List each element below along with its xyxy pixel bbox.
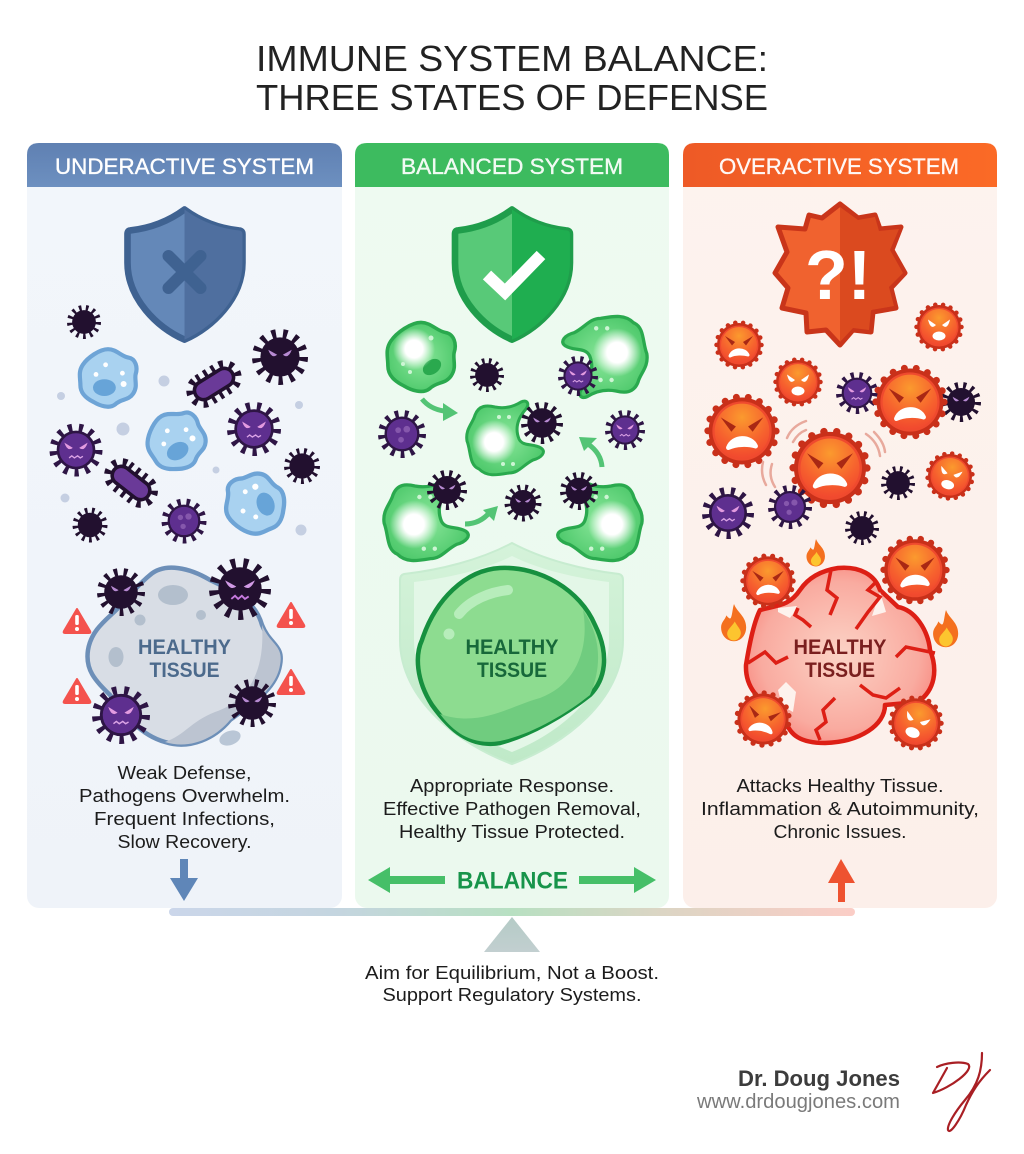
title xyxy=(256,38,768,118)
icons: flames xyxy=(721,539,958,647)
takeaway text xyxy=(365,962,659,1005)
caption: overactive xyxy=(701,775,979,842)
tissue: protected green in shield: TISSUE xyxy=(477,659,547,682)
title: THREE STATES OF DEFENSE xyxy=(256,77,768,118)
arrow: balance left xyxy=(368,867,445,893)
header: balanced xyxy=(355,143,669,187)
tissue: protected green in shield xyxy=(400,543,623,764)
tissue: damaged grey xyxy=(87,568,281,748)
title: IMMUNE SYSTEM BALANCE: xyxy=(256,38,768,79)
caption: underactive: Pathogens Overwhelm. xyxy=(79,785,290,806)
caption: overactive: Attacks Healthy Tissue. xyxy=(736,775,944,796)
caption: balanced: Appropriate Response. xyxy=(410,775,614,796)
header: underactive: UNDERACTIVE SYSTEM xyxy=(55,154,314,179)
caption: balanced xyxy=(383,775,641,842)
arrows: cell movement xyxy=(422,399,602,524)
icon: alarm burst: ?! xyxy=(805,236,871,314)
immune cells: blue xyxy=(80,349,293,542)
caption: overactive: Inflammation & Autoimmunity, xyxy=(701,798,979,819)
panel: balanced system xyxy=(355,143,669,908)
footer: author xyxy=(696,1066,900,1113)
panel: underactive system xyxy=(27,143,342,908)
header: underactive xyxy=(27,143,342,187)
takeaway text: Aim for Equilibrium, Not a Boost. xyxy=(365,962,659,983)
motion arcs xyxy=(762,421,885,487)
inflamed immune cells xyxy=(708,304,978,505)
footer: author: Dr. Doug Jones xyxy=(738,1066,900,1091)
icon: shield with check xyxy=(455,210,570,340)
tissue: damaged grey: HEALTHY xyxy=(138,636,231,659)
icon: shield with X xyxy=(128,210,242,340)
panel: overactive system xyxy=(683,143,997,908)
arrow: balance right xyxy=(579,867,656,893)
immune cells engulfing pathogens xyxy=(382,316,647,561)
signature xyxy=(933,1053,990,1131)
fulcrum triangle xyxy=(484,917,540,952)
caption: underactive: Frequent Infections, xyxy=(94,808,275,829)
tissue: damaged grey: TISSUE xyxy=(150,659,220,682)
cell: whole green top-left xyxy=(387,322,455,391)
takeaway text: Support Regulatory Systems. xyxy=(382,984,642,1005)
caption: underactive: Weak Defense, xyxy=(118,762,252,783)
header: overactive: OVERACTIVE SYSTEM xyxy=(719,154,959,179)
inflamed cells attacking tissue xyxy=(732,538,948,755)
caption: underactive: Slow Recovery. xyxy=(118,831,252,852)
pathogens: loose xyxy=(707,469,912,542)
footer: author: www.drdougjones.com xyxy=(696,1091,900,1113)
icon: alarm burst xyxy=(775,204,905,345)
pathogens attacking tissue xyxy=(97,564,272,739)
arrow: down xyxy=(170,859,198,901)
header: overactive xyxy=(683,143,997,187)
pathogens xyxy=(54,308,317,539)
header: balanced: BALANCED SYSTEM xyxy=(401,154,623,179)
caption: overactive: Chronic Issues. xyxy=(774,821,906,842)
caption: underactive xyxy=(79,762,290,852)
caption: balanced: Healthy Tissue Protected. xyxy=(399,821,625,842)
tissue: cracked inflamed: HEALTHY xyxy=(794,636,886,659)
icons: warning triangles xyxy=(64,603,304,703)
tissue: cracked inflamed xyxy=(746,568,935,743)
tissue: protected green in shield: HEALTHY xyxy=(466,636,558,659)
tissue: cracked inflamed: TISSUE xyxy=(805,659,875,682)
arrow: up xyxy=(828,859,855,902)
balance beam xyxy=(169,908,855,916)
label: balance: BALANCE xyxy=(457,868,568,894)
pathogens: behind inflamed cells xyxy=(840,376,977,418)
caption: balanced: Effective Pathogen Removal, xyxy=(383,798,641,819)
debris particles xyxy=(57,376,306,536)
